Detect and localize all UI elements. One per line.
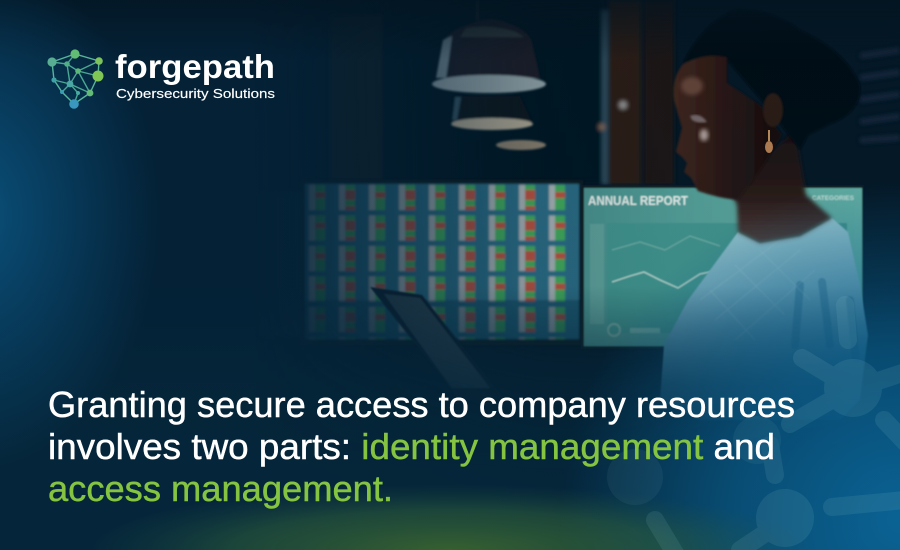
eye	[690, 115, 707, 123]
headline line 3: access management.	[48, 468, 393, 509]
faint far-left monitor	[252, 192, 302, 337]
neck	[730, 130, 832, 243]
earring	[765, 130, 773, 153]
forehead highlight	[681, 77, 703, 95]
woman	[660, 10, 868, 420]
molecule watermark	[607, 305, 900, 550]
pendant lamps	[432, 0, 546, 150]
left trading monitor	[300, 180, 583, 345]
face	[673, 56, 782, 200]
logo icon: network shield	[47, 49, 104, 109]
headline line 2: involves two parts: identity management and	[48, 426, 775, 467]
logo tagline: Cybersecurity Solutions	[116, 86, 276, 101]
ear	[763, 93, 783, 127]
monitor label: CATEGORIES	[812, 195, 855, 202]
annual report monitor	[581, 185, 864, 349]
green bottom glow	[90, 440, 810, 550]
cheek highlight	[700, 129, 708, 141]
shirt	[660, 218, 868, 420]
logo	[47, 48, 276, 109]
hair	[683, 10, 860, 150]
monitor title: ANNUAL REPORT	[588, 194, 688, 208]
logo wordmark: forgepath	[115, 48, 275, 85]
laptop	[370, 287, 505, 400]
headline	[48, 384, 795, 509]
headline line 1: Granting secure access to company resources	[48, 384, 795, 425]
photo scene: office backdrop	[330, 0, 900, 185]
